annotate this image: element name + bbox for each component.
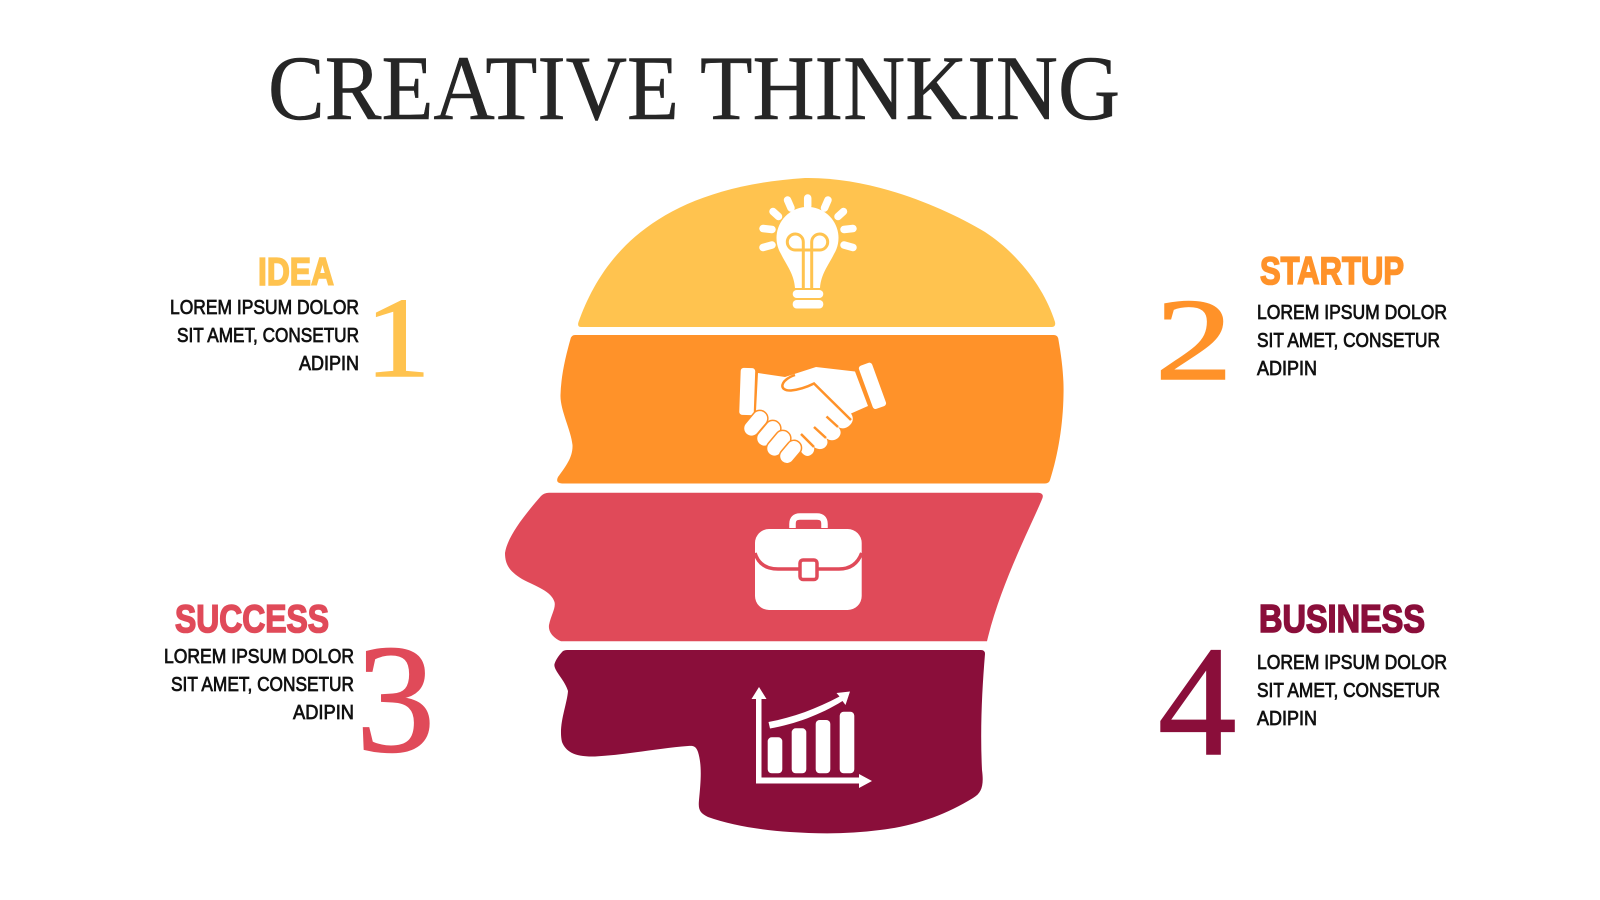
text: idea description [170, 297, 359, 375]
text: business description: LOREM IPSUM DOLOR [1257, 652, 1447, 674]
icon: handshake [739, 362, 887, 467]
callout 2: startup [1155, 250, 1447, 404]
heading: startup: STARTUP [1260, 250, 1404, 293]
icon: light bulb [763, 198, 853, 308]
icon: growth chart [752, 687, 872, 788]
heading: idea: IDEA [258, 251, 334, 294]
text: idea description: ADIPIN [299, 353, 359, 375]
title: THINKING [700, 37, 1120, 139]
text: startup description: SIT AMET, CONSETUR [1257, 330, 1440, 352]
icon: briefcase [755, 516, 862, 610]
callout 1: idea [170, 251, 431, 401]
text: idea description: LOREM IPSUM DOLOR [170, 297, 359, 319]
head: maroon section [554, 650, 985, 833]
head: yellow section [578, 178, 1055, 327]
number 3: 3 [356, 612, 435, 785]
number 1: 1 [365, 275, 431, 401]
number 4: 4 [1158, 614, 1236, 788]
head: red section [505, 493, 1043, 641]
text: idea description: SIT AMET, CONSETUR [177, 325, 359, 347]
text: success description: ADIPIN [293, 702, 354, 724]
callout 4: business [1158, 598, 1447, 788]
text: business description: SIT AMET, CONSETUR [1257, 680, 1440, 702]
title: CREATIVE [268, 37, 679, 139]
text: startup description [1257, 302, 1447, 380]
heading: success: SUCCESS [175, 598, 329, 641]
callout 3: success [164, 598, 435, 785]
text: success description [164, 646, 354, 724]
text: business description [1257, 652, 1447, 730]
text: business description: ADIPIN [1257, 708, 1317, 730]
heading: business: BUSINESS [1259, 598, 1425, 641]
text: success description: SIT AMET, CONSETUR [171, 674, 354, 696]
number 2: 2 [1155, 274, 1233, 404]
title [268, 37, 1120, 139]
head: orange section [557, 335, 1064, 484]
text: startup description: LOREM IPSUM DOLOR [1257, 302, 1447, 324]
text: startup description: ADIPIN [1257, 358, 1317, 380]
text: success description: LOREM IPSUM DOLOR [164, 646, 354, 668]
